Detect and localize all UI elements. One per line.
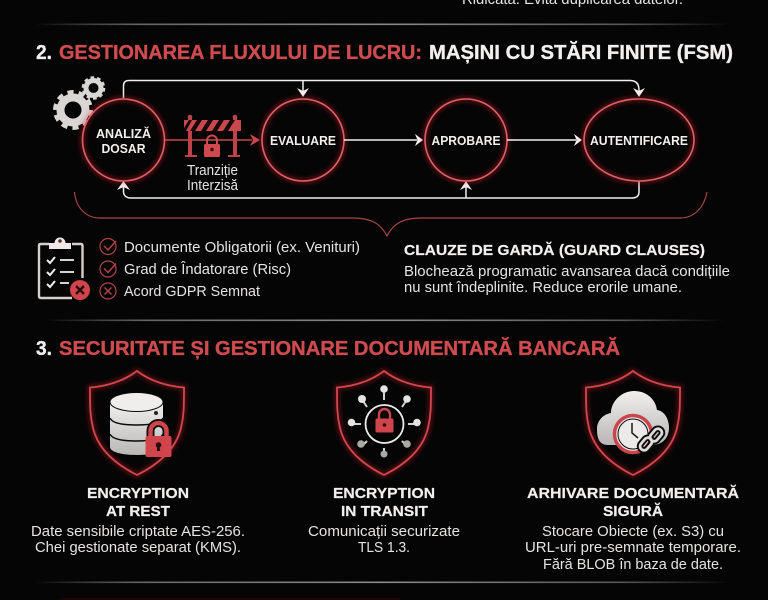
state: Autentificare bbox=[584, 99, 694, 181]
arrow: Aprobare to Autentificare bbox=[507, 134, 582, 146]
text block: secure document archive details bbox=[525, 524, 741, 573]
label: forbidden transition: Interzisă bbox=[187, 178, 239, 194]
panel: finite state machine diagram bbox=[56, 78, 707, 236]
title: encryption in transit: ENCRYPTION bbox=[333, 485, 435, 502]
text block: secure document archive details: URL-uri pre-semnate temporare. bbox=[525, 540, 741, 556]
label: forbidden transition bbox=[187, 163, 239, 194]
text block: guard clauses: CLAUZE DE GARDĂ (GUARD CLAUSES) bbox=[404, 242, 705, 259]
panel: secure document archive bbox=[525, 371, 741, 573]
state: Analiză Dosar bbox=[82, 99, 164, 181]
state: Analiză Dosar: DOSAR bbox=[102, 142, 146, 156]
state: Evaluare bbox=[262, 99, 344, 181]
checklist item: documents: Documente Obligatorii (ex. Venituri) bbox=[124, 240, 360, 256]
arrow: Evaluare to Aprobare bbox=[344, 134, 423, 146]
icon: shield with database and lock bbox=[90, 371, 184, 475]
text block: encryption at rest details: Date sensibile criptate AES-256. bbox=[31, 524, 245, 540]
brace: connects the diagram to guard clauses bbox=[74, 192, 707, 236]
title: encryption at rest bbox=[87, 485, 189, 520]
icon: clipboard with checks bbox=[39, 238, 90, 300]
heading: section 2 bbox=[36, 41, 733, 64]
icon: gears bbox=[56, 78, 104, 128]
title: encryption in transit: IN TRANSIT bbox=[341, 503, 428, 520]
icon: barrier with lock bbox=[184, 115, 241, 157]
title: secure document archive: ARHIVARE DOCUMENTARĂ bbox=[527, 485, 739, 502]
text block: secure document archive details: Stocare Obiecte (ex. S3) cu bbox=[542, 524, 724, 540]
arrow: bottom return path bbox=[117, 181, 639, 198]
heading: section 2: 2. bbox=[36, 41, 52, 64]
text block: guard clauses: nu sunt îndeplinite. Reduce erorile umane. bbox=[404, 280, 682, 296]
text block: encryption at rest details bbox=[31, 524, 245, 556]
state: Analiză Dosar: ANALIZĂ bbox=[96, 126, 151, 141]
heading: section 2: MAȘINI CU STĂRI FINITE (FSM) bbox=[429, 41, 733, 64]
heading: section 3: 3. bbox=[36, 337, 52, 360]
label: forbidden transition: Tranziție bbox=[187, 163, 238, 179]
state: Aprobare bbox=[425, 99, 507, 181]
text block: encryption in transit details bbox=[308, 524, 460, 556]
title: encryption at rest: AT REST bbox=[106, 503, 170, 520]
text block: secure document archive details: Fără BLOB în baza de date. bbox=[543, 557, 723, 573]
heading: section 3: SECURITATE ȘI GESTIONARE DOCUMENTARĂ BANCARĂ bbox=[59, 337, 620, 360]
title: secure document archive bbox=[527, 485, 739, 520]
state: Evaluare: EVALUARE bbox=[270, 134, 336, 148]
icon: shield with cloud, clock and chain bbox=[586, 371, 680, 475]
state: Autentificare: AUTENTIFICARE bbox=[590, 134, 688, 148]
icon: shield with network lock bbox=[337, 371, 431, 475]
title: encryption in transit bbox=[333, 485, 435, 520]
heading: section 2: GESTIONAREA FLUXULUI DE LUCRU: bbox=[59, 41, 422, 64]
text block: guard clauses: Blochează programatic avansarea dacă condițiile bbox=[404, 264, 730, 280]
title: secure document archive: SIGURĂ bbox=[603, 503, 663, 520]
text block: guard clauses bbox=[404, 242, 730, 296]
title: encryption at rest: ENCRYPTION bbox=[87, 485, 189, 502]
panel: guard checklist bbox=[39, 238, 360, 300]
text block: encryption in transit details: TLS 1.3. bbox=[358, 540, 410, 556]
checklist item: GDPR consent: Acord GDPR Semnat bbox=[124, 284, 260, 300]
panel: encryption at rest bbox=[31, 371, 245, 556]
text block: encryption in transit details: Comunicații securizate bbox=[308, 524, 460, 540]
text block: encryption at rest details: Chei gestionate separat (KMS). bbox=[35, 540, 241, 556]
state: Aprobare: APROBARE bbox=[432, 134, 500, 148]
arrow: forbidden transition bbox=[165, 134, 260, 146]
panel: encryption in transit bbox=[308, 371, 460, 556]
checklist item: debt ratio: Grad de Îndatorare (Risc) bbox=[124, 261, 291, 278]
arrow: top return path bbox=[124, 80, 645, 98]
